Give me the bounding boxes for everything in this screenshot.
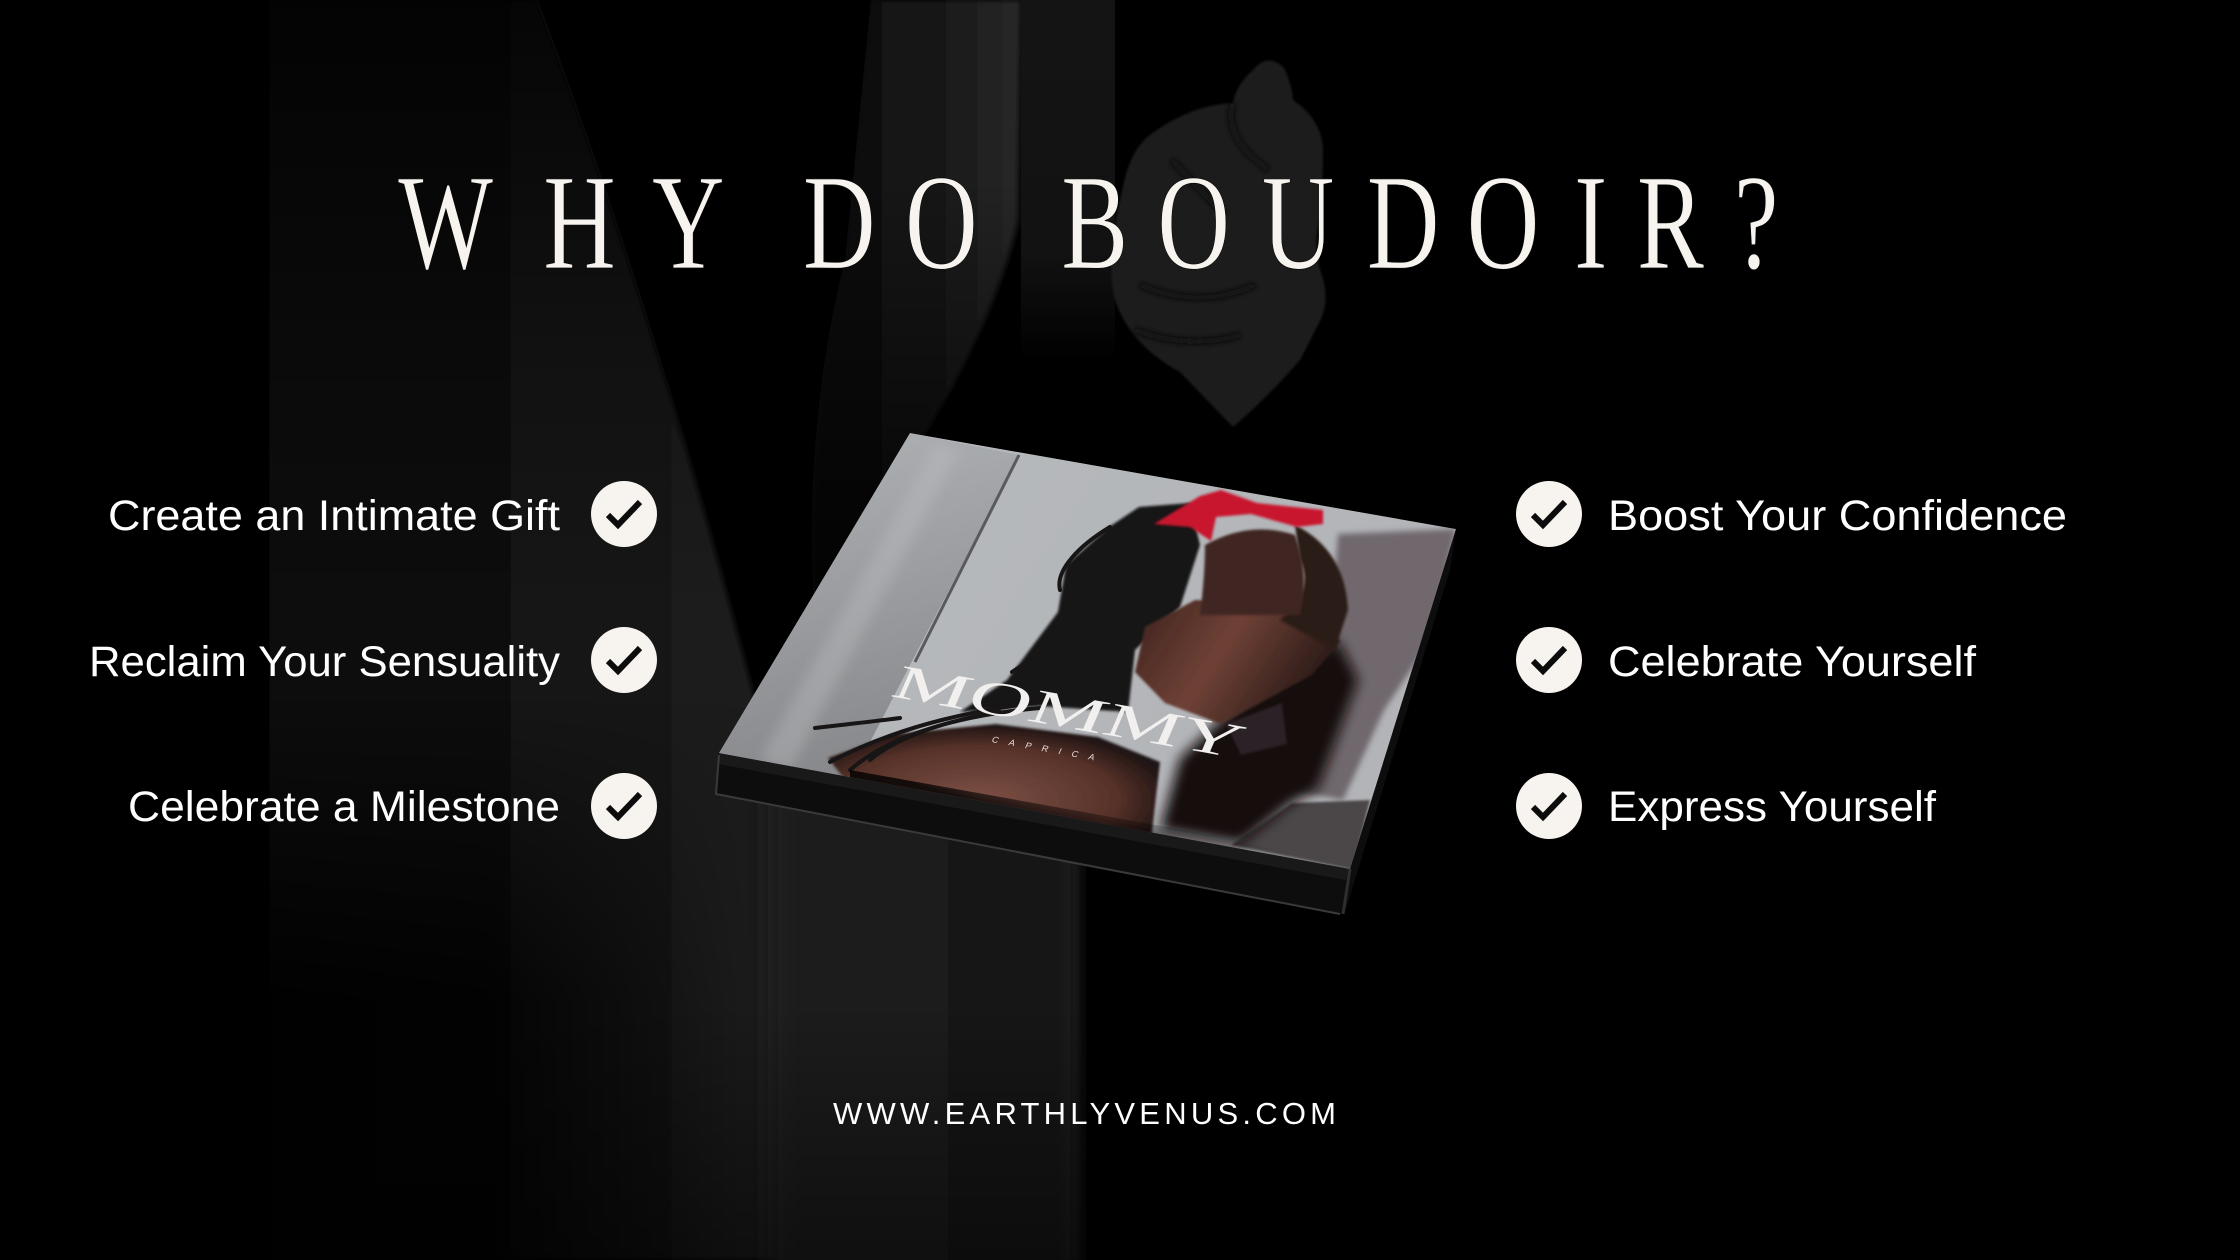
- album cover: [719, 433, 1456, 880]
- cover photo: abstract figure, face: [1200, 529, 1304, 615]
- cover shadow: [1160, 640, 1358, 844]
- cover floor: [1231, 800, 1370, 870]
- photo album mockup: [716, 433, 1456, 914]
- item: Reclaim Your Sensuality: Reclaim Your Sensuality: [89, 638, 561, 686]
- album page block and edges: [716, 529, 1456, 914]
- cover photo: abstract figure, lower tone: [827, 722, 1162, 833]
- item: Express Yourself: [1516, 773, 1937, 839]
- cover photo: abstract figure, shoulder: [1135, 600, 1340, 724]
- item: Create an Intimate Gift: [108, 481, 657, 547]
- album subtitle: CAPRICA: [990, 735, 1097, 762]
- item: Reclaim Your Sensuality: [89, 627, 657, 693]
- cover bottom edge shading: [850, 770, 1302, 860]
- website url: WWW.EARTHLYVENUS.COM: [833, 1096, 1336, 1131]
- background: dark studio photo: [270, 0, 1326, 1260]
- item: Celebrate a Milestone: Celebrate a Milestone: [128, 783, 560, 831]
- cover photo: abstract figure, hair: [815, 503, 1200, 770]
- title: WHY DO BOUDOIR?: [398, 146, 1778, 298]
- cover photo: abstract figure, raised arm: [1280, 525, 1348, 650]
- cover spine: [719, 433, 1019, 800]
- cover wall texture: [1290, 529, 1456, 800]
- item: Boost Your Confidence: Boost Your Confidence: [1608, 492, 2067, 540]
- item: Create an Intimate Gift: Create an Intimate Gift: [108, 492, 560, 540]
- background hand: [1111, 60, 1326, 427]
- item: Boost Your Confidence: [1516, 481, 2067, 547]
- left list: reasons: [89, 481, 657, 839]
- item: Celebrate a Milestone: [128, 773, 657, 839]
- item: Celebrate Yourself: Celebrate Yourself: [1608, 638, 1977, 686]
- right list: reasons: [1516, 481, 2067, 839]
- album title MOMMY: MOMMY: [885, 655, 1254, 768]
- item: Express Yourself: Express Yourself: [1608, 783, 1937, 831]
- cover photo: abstract figure, red lace: [1154, 490, 1323, 541]
- cover photo: abstract figure, dark garment: [1226, 703, 1287, 755]
- item: Celebrate Yourself: [1516, 627, 1977, 693]
